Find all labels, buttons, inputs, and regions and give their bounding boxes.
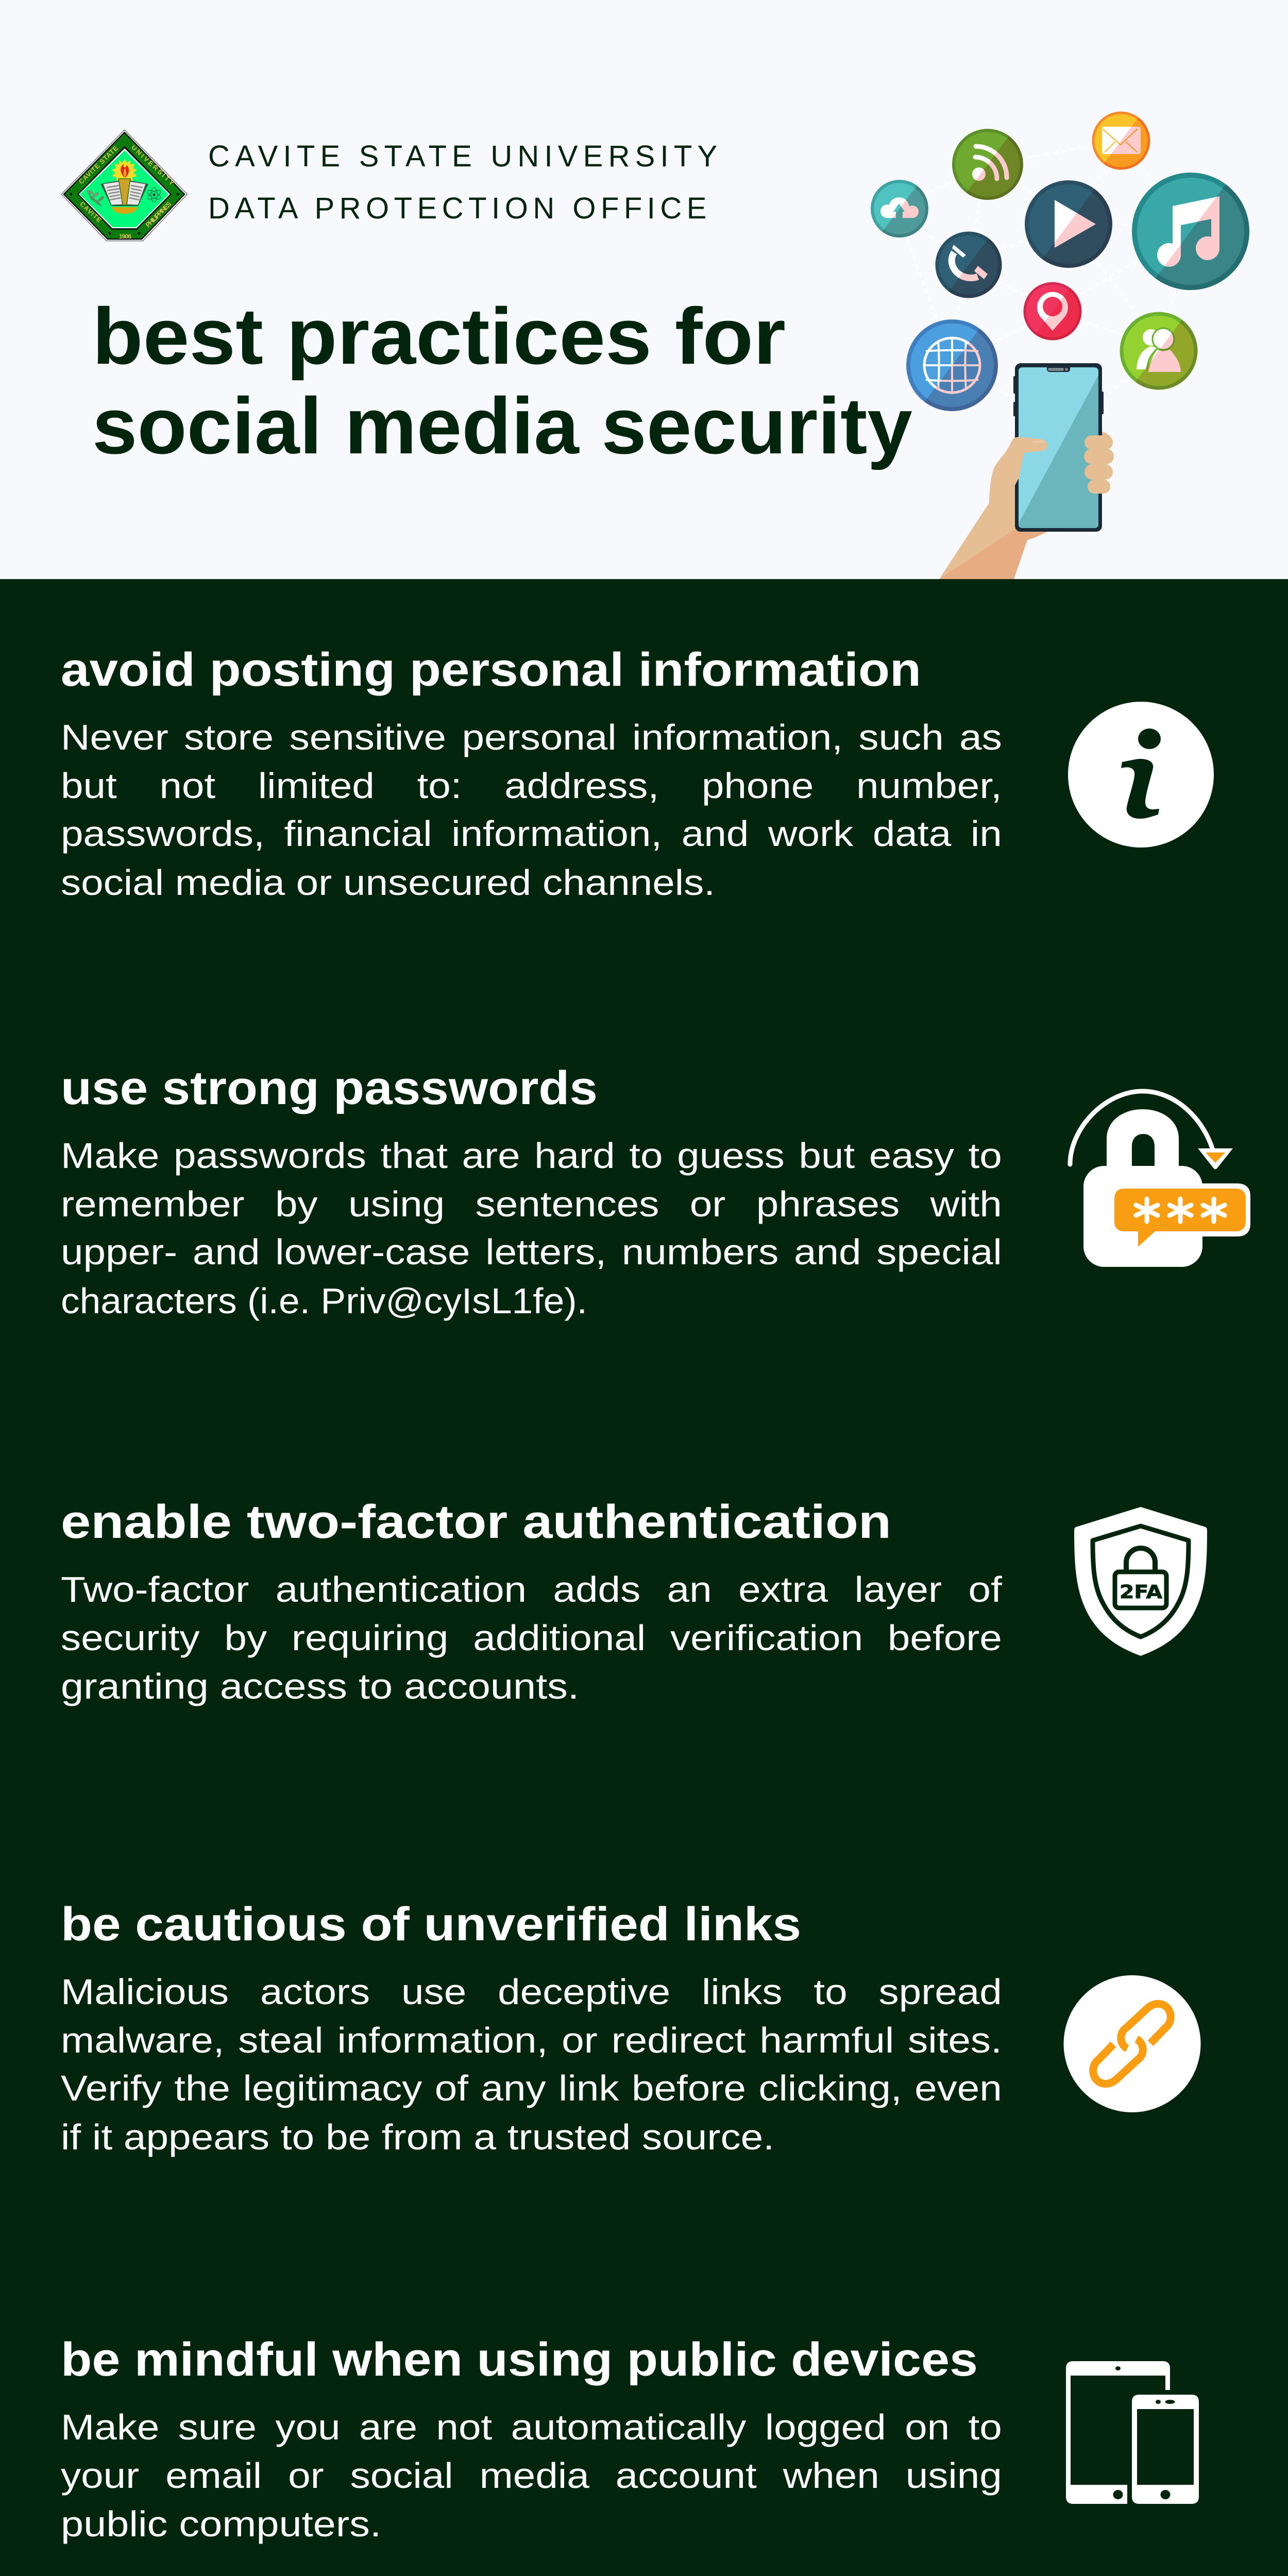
icon: location: [1025, 283, 1081, 340]
smartphone: [1013, 363, 1104, 532]
text block: Two-factor authentication adds an extra layer of: [61, 1569, 1002, 1609]
text block: security by requiring additional verification before: [61, 1618, 1002, 1658]
icon: password lock: [1067, 1089, 1250, 1267]
panel: be cautious of unverified links: [61, 1898, 1200, 2157]
text block: Malicious actors use deceptive links to spread: [61, 1972, 1002, 2012]
text block: malware, steal information, or redirect harmful sites.: [61, 2020, 1002, 2060]
icon: Cavite State University seal: CAVITE STATE: [77, 144, 120, 185]
title: best practices for: [92, 292, 786, 381]
icon: music note: [1134, 175, 1249, 290]
text block: upper- and lower-case letters, numbers and special: [61, 1232, 1002, 1272]
icon: Cavite State University seal: UNIVERSITY: [130, 143, 176, 187]
icon: Cavite State University seal: CAVITE: [78, 200, 103, 224]
icon: rss feed: [954, 130, 1023, 200]
icon: contacts: [1122, 314, 1197, 389]
thumb: [1009, 437, 1047, 485]
text block: social media or unsecured channels.: [61, 862, 715, 903]
title: [92, 292, 912, 470]
text block: granting access to accounts.: [61, 1666, 579, 1706]
icon: chain link: [1063, 1975, 1200, 2112]
text block: [61, 1136, 1002, 1321]
heading: use strong passwords: [61, 1062, 598, 1114]
text block: public computers.: [61, 2504, 381, 2544]
icon: tablet and phone: [1066, 2361, 1199, 2504]
text block: Make sure you are not automatically logged on to: [61, 2407, 1002, 2447]
heading: organisation name: CAVITE STATE UNIVERSITY: [208, 140, 722, 173]
text block: Verify the legitimacy of any link before clicking, even: [61, 2068, 1002, 2108]
fingers: [1084, 432, 1114, 494]
text block: your email or social media account when using: [61, 2455, 1002, 2496]
text block: [61, 1569, 1002, 1706]
heading: organisation name: DATA PROTECTION OFFICE: [208, 192, 711, 225]
heading: organisation name: [208, 140, 722, 225]
heading: enable two-factor authentication: [61, 1496, 891, 1548]
heading: be mindful when using public devices: [61, 2333, 978, 2386]
text block: Never store sensitive personal information, such as: [61, 717, 1002, 757]
panel: dark content background: [0, 579, 1288, 2576]
text block: [61, 717, 1002, 903]
icon: 2FA shield: 2FA: [1120, 1582, 1162, 1603]
icon: information: [1068, 702, 1214, 848]
text block: if it appears to be from a trusted source.: [61, 2117, 774, 2157]
text block: [61, 2407, 1002, 2544]
arm: [939, 443, 1047, 579]
icon: mail: [1093, 113, 1150, 170]
icon: Cavite State University seal: [61, 129, 188, 241]
text block: characters (i.e. Priv@cyIsL1fe).: [61, 1281, 587, 1321]
heading: be cautious of unverified links: [61, 1898, 801, 1951]
illustration: hand holding phone with social media icons: [871, 111, 1249, 579]
icon: Cavite State University seal: PHILIPPINES: [144, 200, 173, 229]
panel: be mindful when using public devices: [61, 2333, 1199, 2544]
panel: enable two-factor authentication: [61, 1496, 1207, 1706]
icon: Cavite State University seal: 1906: [119, 233, 131, 240]
title: social media security: [92, 381, 912, 470]
icon: cloud upload: [872, 181, 928, 238]
heading: avoid posting personal information: [61, 643, 921, 696]
text block: remember by using sentences or phrases with: [61, 1184, 1002, 1224]
panel: avoid posting personal information: [61, 643, 1214, 903]
icon: globe: [908, 321, 998, 411]
icon: phone call: [937, 233, 1002, 298]
panel: use strong passwords: [61, 1062, 1250, 1321]
text block: Make passwords that are hard to guess but easy to: [61, 1136, 1002, 1176]
text block: passwords, financial information, and work data in: [61, 814, 1002, 854]
text block: [61, 1972, 1002, 2157]
icon: 2FA shield: [1074, 1507, 1207, 1656]
icon: play: [1027, 182, 1112, 268]
text block: but not limited to: address, phone number,: [61, 766, 1002, 806]
